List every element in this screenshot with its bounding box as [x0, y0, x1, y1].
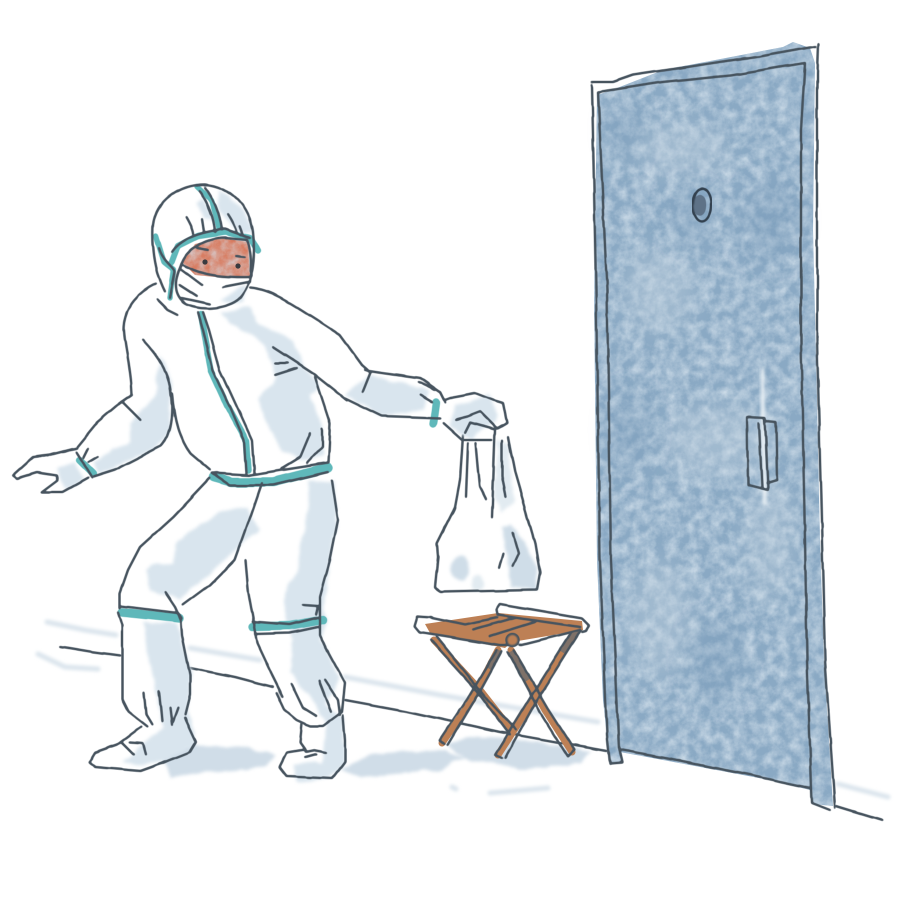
face [182, 238, 250, 278]
boots [89, 715, 345, 778]
worker in protective suit [13, 184, 507, 782]
stool legs [434, 628, 577, 755]
wall base line [60, 647, 882, 820]
floor shadows [160, 737, 592, 778]
stool [415, 604, 589, 758]
zip [198, 312, 246, 473]
right arm top [250, 288, 362, 365]
right cuff and hand [345, 365, 507, 440]
bag shading [450, 440, 537, 590]
door [592, 42, 835, 810]
eyes [202, 259, 241, 269]
suit shading [55, 190, 497, 782]
floor brush strokes [38, 622, 888, 797]
door dark patches [611, 100, 798, 700]
door frame lines [592, 43, 835, 810]
left arm [77, 284, 156, 447]
legs [118, 478, 345, 727]
door panel [594, 42, 833, 806]
stool seat fabric [425, 613, 583, 648]
door handle [747, 417, 777, 490]
plastic bag [435, 430, 540, 592]
waist [213, 463, 328, 475]
door peephole [693, 189, 711, 221]
suit outline [77, 284, 362, 485]
door highlight [761, 368, 767, 505]
stool seat lines [415, 604, 589, 646]
left cuff and hand [13, 448, 98, 492]
hood and mask [153, 184, 254, 315]
door soft patches [625, 125, 792, 680]
bag outline [435, 435, 540, 592]
torso [172, 393, 210, 470]
stool leg outlines [431, 628, 581, 758]
bag folds [466, 430, 519, 568]
stool leg shading [488, 630, 576, 680]
teal suit trim [79, 186, 436, 627]
